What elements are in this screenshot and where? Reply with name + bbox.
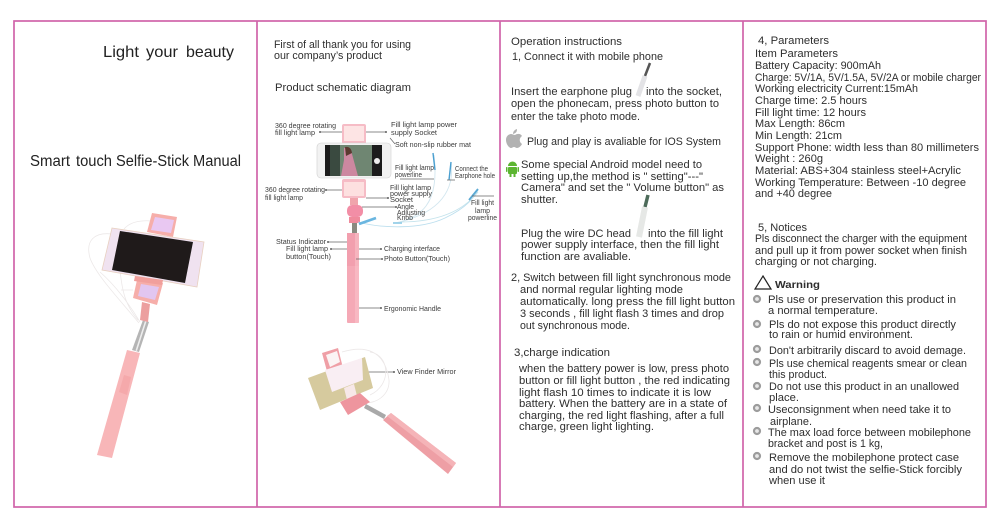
step 3: charge indication: when the battery power is low, press photo [518,363,729,375]
android note: Camera" and set the " Volume button" as [521,182,725,194]
callout labels: Fill light lamp [390,185,431,192]
step 2: switch lighting mode: 2, Switch between fill light synchronous mode [511,272,731,284]
front-view stick diagram [317,124,391,323]
warning heading: Warning [775,279,820,291]
callout labels: power supply [390,191,433,198]
callout labels: lamp [475,208,490,215]
panel: operation instructions [506,36,735,433]
intro text: First of all thank you for using [274,39,411,51]
step 3: charge indication: charging, the red light flashing, after a full [519,410,724,422]
callout labels: fill light lamp [275,130,315,137]
DC plug instruction: function are avaliable. [521,251,631,263]
step 3: charge indication: battery. When the battery are in a state of [519,398,728,410]
DC plug instruction: power supply interface, then the fill light [521,239,719,251]
callout labels: Fill light lamp [395,165,434,172]
callout labels: Fill light lamp [286,246,328,253]
step 1: connect to phone: 1, Connect it with mobile phone [512,51,663,63]
android note: setting up,the method is " setting"---" [521,171,703,183]
step 2: switch lighting mode: and normal regular lighting mode [520,284,683,296]
callout labels: button(Touch) [286,254,331,261]
callout labels: Soft non-slip rubber mat [395,142,471,149]
step 3: charge indication [514,347,730,433]
panel: schematic diagram [265,39,497,474]
warning text: Pls use chemical reagents smear or clean [769,358,967,370]
warning text: Remove the mobilephone protect case [769,452,959,464]
callout labels: Photo Button(Touch) [384,256,450,263]
parameters list: 4, Parameters [758,35,830,47]
callout labels: Socket [390,197,413,204]
panel: cover [30,44,241,458]
android note: Some special Android model need to [521,159,702,171]
notices: charging or not charging. [755,256,877,268]
callout labels: Earphone hole [455,173,495,180]
icon: apple [506,129,522,148]
callout labels: Status Indicator [276,239,327,246]
heading: operation instructions: Operation instructions [511,36,623,48]
warning text: when use it [768,475,825,487]
callout labels: View Finder Mirror [397,369,457,376]
callout labels: powerline [395,172,422,179]
parameters list: Battery Capacity: 900mAh [755,60,881,72]
warning text: Pls do not expose this product directly [769,319,957,331]
icon: DC head [639,195,648,237]
step 2: switch lighting mode: automatically. long press the fill light button [520,296,735,308]
callout labels: 360 degree rotating [275,123,336,130]
step 1: connect to phone: into the socket, [646,86,722,98]
panel: parameters and warnings [754,35,981,487]
warning text: Useconsignment when need take it to [768,404,951,416]
callout labels: powerline [468,215,497,222]
title: manual: Selfie-Stick [116,153,189,170]
warning text: this product. [769,369,827,381]
iOS note: Plug and play is avaliable for IOS System [527,136,721,148]
warning text: airplane. [770,416,812,428]
callout labels: fill light lamp [265,195,303,202]
callout labels: Ergonomic Handle [384,306,441,313]
DC plug instruction: Plug the wire DC head [521,228,631,240]
callout labels [265,122,497,376]
warning text: bracket and post is 1 kg, [768,438,883,450]
parameters list: Item Parameters [755,48,839,60]
parameters list: Material: ABS+304 stainless steel+Acrylic [755,165,962,177]
android note [521,159,725,206]
callout labels: 360 degree rotating [265,187,325,194]
icon: earphone plug [638,63,650,96]
title: light your beauty: Light [103,44,140,61]
title: light your beauty: your [146,44,178,61]
intro text [274,39,411,62]
warning bullets [754,296,760,459]
step 3: charge indication: 3,charge indication [514,347,610,359]
warning text: to rain or humid environment. [769,329,913,341]
icon: warning triangle [755,276,771,289]
step 1: connect to phone: open the phonecam, press photo button to [511,98,719,110]
notices: and pull up it from power socket when finish [755,245,967,257]
parameters list: Working Temperature: Between -10 degree [755,177,966,189]
parameters list: and +40 degree [755,188,832,200]
step 1: connect to phone: enter the take photo mode. [511,111,640,123]
callout labels: Connect the [455,166,488,173]
title: manual: Manual [193,153,241,170]
notices [755,222,967,268]
rear-view stick photo [308,348,456,474]
callout labels: supply Socket [391,130,437,137]
warning text: Pls use or preservation this product in [768,294,956,306]
warning text [768,294,971,487]
android note: shutter. [521,194,558,206]
parameters list: Min Length: 21cm [755,130,842,142]
title: manual: Smart [30,153,71,170]
title: manual [30,153,241,170]
parameters list [755,35,981,200]
step 2: switch lighting mode [511,272,735,332]
parameters list: Charge time: 2.5 hours [755,95,868,107]
callout labels: Adjusting [397,210,425,217]
heading: product schematic diagram: Product schematic diagram [275,82,411,94]
warning text: Do not use this product in an unallowed [769,381,959,393]
parameters list: Support Phone: width less than 80 millimeters [755,142,980,154]
title: light your beauty [103,44,234,61]
notices: Pls disconnect the charger with the equipment [755,233,967,245]
step 3: charge indication: light flash 10 times to indicate it is low [519,387,711,399]
product photo: pink selfie stick [89,213,204,458]
intro text: our company’s product [274,50,382,62]
step 2: switch lighting mode: 3 seconds , fill light flash 3 times and drop [520,308,724,320]
warning text: place. [769,392,799,404]
parameters list: Max Length: 86cm [755,118,845,130]
callout labels: Charging interface [384,246,440,253]
step 3: charge indication: button or fill light button , the red indicating [519,375,730,387]
callout labels: Fill light [471,200,494,207]
parameters list: Weight : 260g [755,153,823,165]
callout labels: Fill light lamp power [391,122,458,129]
DC plug instruction: into the fill light [648,228,723,240]
DC plug instruction [521,228,723,263]
parameters list: Working electricity Current:15mAh [755,83,918,95]
callout labels: Angle [397,204,414,211]
step 1: connect to phone: Insert the earphone plug [511,86,632,98]
warning text: The max load force between mobilephone [768,427,971,439]
title: manual: touch [76,153,112,170]
power cables [358,153,478,227]
step 3: charge indication: charge, green light lighting. [519,421,654,433]
step 2: switch lighting mode: out synchronous mode. [520,320,630,332]
parameters list: Charge: 5V/1A, 5V/1.5A, 5V/2A or mobile charger [755,72,981,84]
icon: android [506,162,519,177]
warning text: a normal temperature. [768,305,878,317]
callout labels: Knob [397,215,413,222]
step 1: connect to phone [511,51,722,123]
parameters list: Fill light time: 12 hours [755,107,867,119]
warning text: and do not twist the selfie-Stick forcibly [769,464,963,476]
warning text: Don't arbitrarily discard to avoid demage. [769,345,966,357]
notices: 5, Notices [758,222,808,234]
title: light your beauty: beauty [186,44,234,61]
